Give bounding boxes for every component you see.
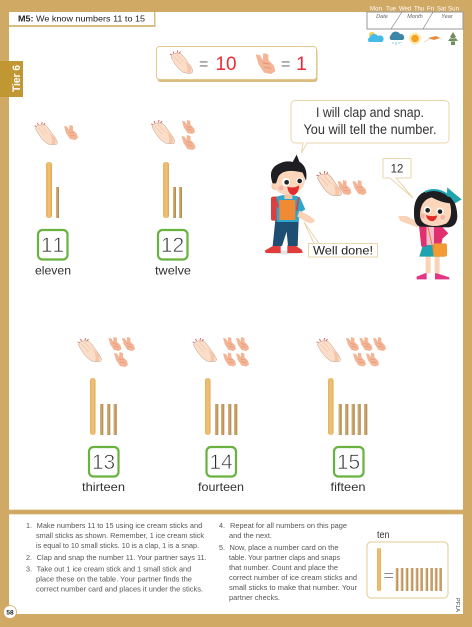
number group: fifteen: 15	[337, 451, 360, 474]
instructions: left column: Clap and snap the number 11. Your partner says 11.	[37, 553, 207, 562]
speech bubble: well done: Well done!	[313, 244, 373, 258]
speech bubble: boy: You will tell the number.	[304, 122, 436, 137]
speech bubble: boy: I will clap and snap.	[316, 105, 424, 120]
number group: fourteen: 14	[209, 451, 233, 474]
instructions: right column: partner checks.	[229, 593, 280, 602]
number group: eleven: 11	[41, 234, 64, 257]
icon: rain cloud	[390, 32, 404, 45]
speech bubble: girl says 12: 12	[391, 164, 403, 176]
icon: clap	[170, 50, 193, 74]
instructions: right column: 4.	[219, 521, 225, 530]
instructions: left column: is equal to 10 small sticks. 10 is a clap, 1 is a snap.	[36, 541, 199, 550]
callout: clap equals 10, snap equals 1	[156, 46, 318, 82]
instructions: left column: 2.	[26, 553, 32, 562]
page number: 58	[6, 610, 14, 616]
page number	[4, 606, 16, 618]
icon: wind with leaves	[424, 36, 442, 42]
number group: twelve: twelve	[155, 264, 191, 278]
character: girl	[398, 187, 462, 279]
clap and two snaps between the children	[316, 171, 366, 196]
number group: fourteen	[192, 337, 249, 494]
number group: thirteen: thirteen	[82, 480, 125, 494]
instructions: left column: Make numbers 11 to 15 using ice cream sticks and	[37, 521, 202, 530]
instructions: left column: 3.	[26, 564, 32, 574]
date and weekday header: Tue	[386, 6, 397, 12]
instructions: right column: Now, place a number card on the	[230, 543, 338, 552]
title: M5: We know numbers 11 to 15	[18, 14, 145, 24]
date and weekday header: Year	[441, 14, 454, 20]
speech bubble: well done	[304, 222, 378, 258]
equals one	[281, 53, 307, 75]
date and weekday header	[367, 6, 463, 29]
speech bubble: girl says 12	[383, 158, 413, 198]
instructions: right column: that number. Count and place the	[229, 563, 338, 572]
number group: eleven	[34, 122, 78, 278]
equals one: 1	[296, 53, 307, 75]
instructions: left column: small sticks as shown. Remember, 1 ice cream stick	[36, 531, 204, 540]
number group: fifteen: fifteen	[330, 480, 366, 494]
equals ten: =	[199, 56, 208, 73]
number group: thirteen: 13	[92, 451, 115, 474]
icon: snap	[256, 53, 275, 74]
number group: eleven: eleven	[35, 264, 71, 278]
number group: fifteen	[316, 337, 386, 494]
date and weekday header: Mon	[370, 6, 382, 12]
instructions: left column: place these on the table. Your partner finds the	[36, 574, 192, 584]
equals ten: 10	[216, 53, 237, 75]
date and weekday header: Sat	[437, 6, 446, 12]
number group: thirteen	[78, 337, 135, 494]
title	[9, 12, 156, 27]
icon: pine tree	[448, 32, 458, 45]
instructions: right column: table. Your partner claps and snaps	[229, 553, 340, 562]
tier tab: Tier 6	[11, 65, 23, 92]
instructions: left column	[26, 521, 207, 594]
ten equals ten small sticks panel: ten	[377, 530, 390, 541]
date and weekday header: Wed	[399, 6, 411, 12]
instructions: right column	[219, 521, 358, 602]
number group: fourteen: fourteen	[198, 480, 244, 494]
equals ten	[199, 53, 237, 75]
character: boy	[265, 155, 315, 254]
instructions: right column: correct number of ice cream sticks and	[229, 573, 357, 582]
instructions: left column: Take out 1 ice cream stick and 1 small stick and	[37, 564, 191, 574]
instructions: right column: 5.	[219, 543, 225, 552]
instructions: right column: small sticks to make that number. Your	[229, 583, 358, 592]
icon: sun	[409, 32, 421, 44]
instructions: left column: 1.	[26, 521, 32, 530]
print code: PF1A	[454, 598, 460, 613]
date and weekday header: Date	[376, 14, 388, 20]
date and weekday header: Thu	[414, 6, 424, 12]
equals one: =	[281, 56, 290, 73]
instructions: right column: Repeat for all numbers on this page	[230, 521, 347, 530]
tier tab	[0, 61, 23, 97]
icon: sun and cloud	[368, 32, 384, 42]
ten equals ten small sticks panel	[367, 530, 448, 598]
number group: twelve	[151, 120, 196, 278]
speech bubble: boy	[291, 100, 449, 153]
date and weekday header: Fri	[427, 6, 434, 12]
instructions: right column: and the next.	[229, 531, 272, 540]
instructions: left column: correct number card and places it under the sticks.	[36, 584, 203, 594]
number group: twelve: 12	[161, 234, 184, 257]
date and weekday header: Sun	[448, 6, 459, 12]
date and weekday header: Month	[407, 14, 423, 20]
